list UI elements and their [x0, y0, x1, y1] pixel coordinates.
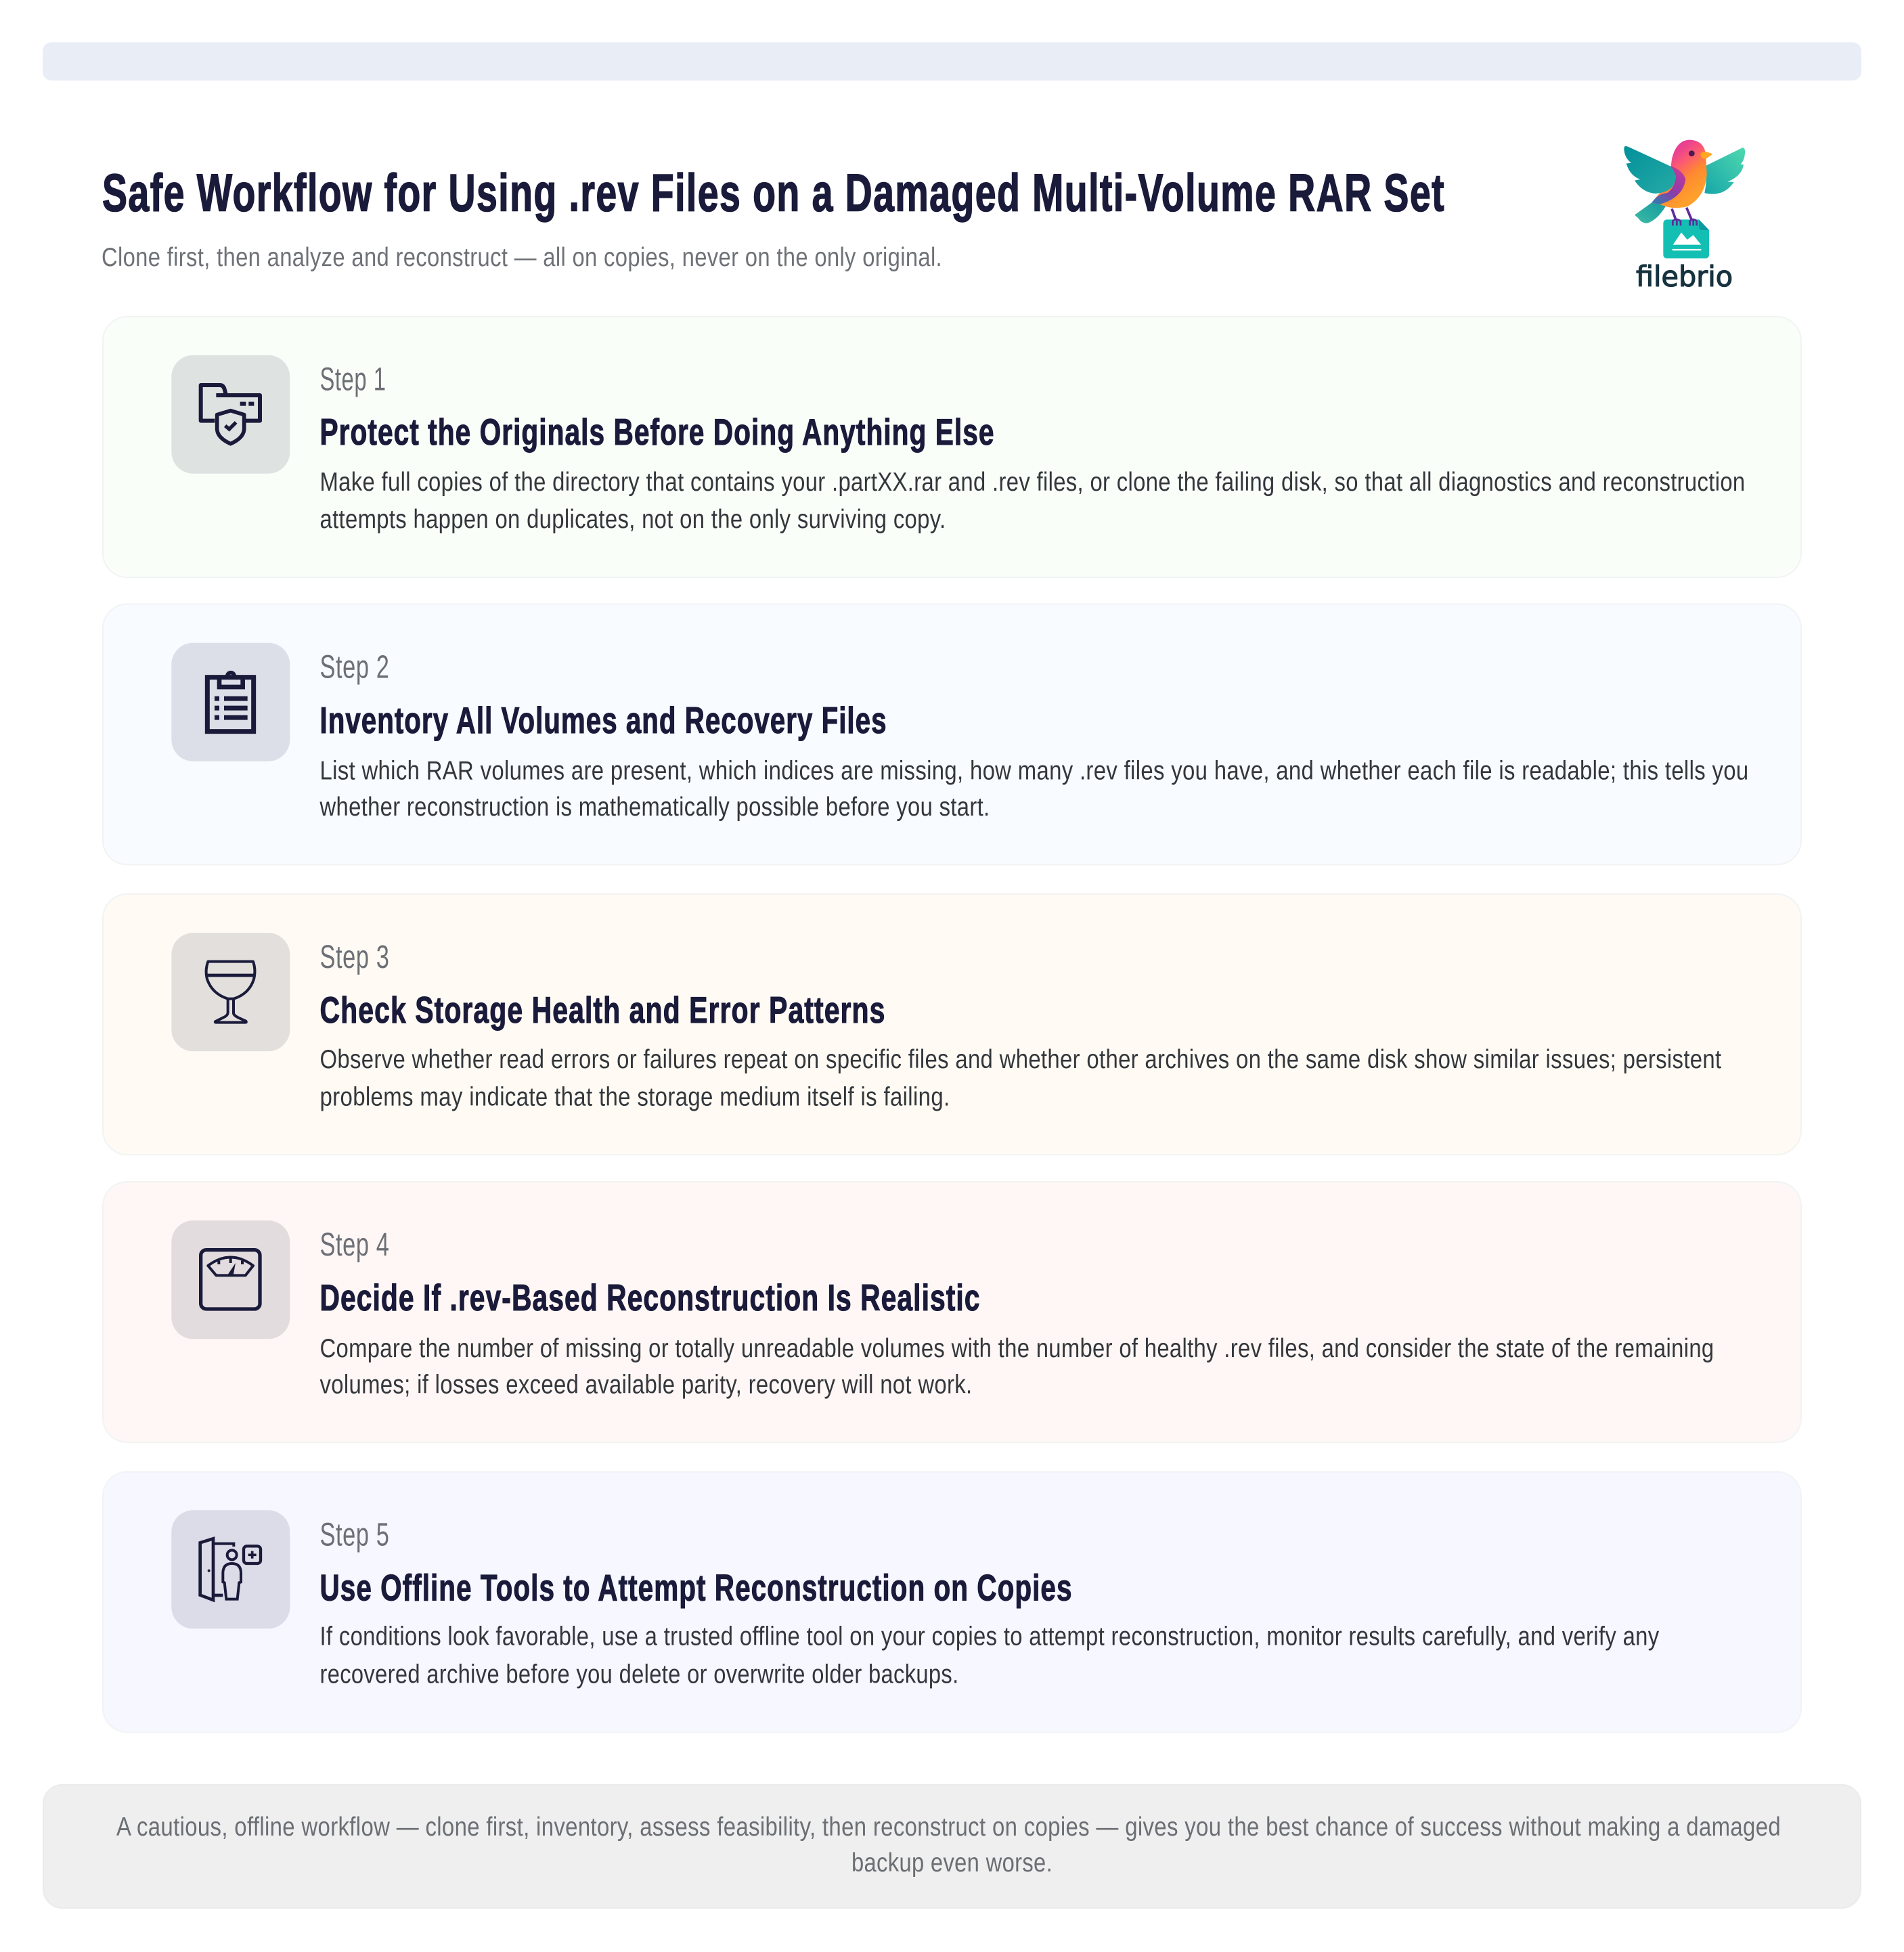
panel: step 5 — [103, 1471, 1801, 1733]
step label: Step 1 — [319, 361, 386, 398]
step description: whether reconstruction is mathematically possible before you start. — [319, 793, 990, 822]
step heading: Check Storage Health and Error Patterns — [319, 989, 885, 1031]
icon: clipboard checklist — [171, 643, 290, 761]
icon: door, person and medical sign — [171, 1510, 290, 1628]
step description — [319, 468, 1745, 534]
step heading: Decide If .rev-Based Reconstruction Is Realistic — [319, 1277, 980, 1318]
top bar — [43, 42, 1861, 81]
panel: step 4 — [103, 1182, 1801, 1442]
step label: Step 5 — [319, 1517, 390, 1553]
step description — [319, 1334, 1714, 1400]
icon: folder with shield — [171, 355, 290, 474]
step heading: Inventory All Volumes and Recovery Files — [319, 699, 887, 741]
panel: step 1 — [103, 317, 1801, 577]
step heading: Protect the Originals Before Doing Anything Else — [319, 411, 995, 453]
icon: weighing scale — [171, 1220, 290, 1339]
logo: filebrio — [1624, 140, 1745, 293]
logo: filebrio: filebrio — [1636, 260, 1733, 293]
step label: Step 2 — [319, 650, 390, 685]
step description: recovered archive before you delete or overwrite older backups. — [319, 1660, 958, 1689]
step label: Step 4 — [319, 1227, 390, 1263]
step description: If conditions look favorable, use a trusted offline tool on your copies to attempt reconstruction, monitor results carefully, and verify any — [319, 1622, 1660, 1651]
step description: attempts happen on duplicates, not on the only surviving copy. — [319, 505, 946, 534]
step description — [319, 1622, 1660, 1689]
step description: volumes; if losses exceed available parity, recovery will not work. — [319, 1370, 972, 1400]
panel: step 3 — [103, 894, 1801, 1155]
footer callout — [43, 1785, 1861, 1908]
step description: problems may indicate that the storage medium itself is failing. — [319, 1083, 950, 1111]
step description — [319, 757, 1749, 822]
step description — [319, 1045, 1722, 1111]
step label: Step 3 — [319, 939, 390, 975]
step heading: Use Offline Tools to Attempt Reconstruction on Copies — [319, 1566, 1072, 1608]
icon: wine glass — [171, 933, 290, 1051]
panel: step 2 — [103, 604, 1801, 865]
subtitle: Clone first, then analyze and reconstruct — all on copies, never on the only original. — [102, 243, 942, 272]
footer callout: backup even worse. — [851, 1848, 1053, 1878]
